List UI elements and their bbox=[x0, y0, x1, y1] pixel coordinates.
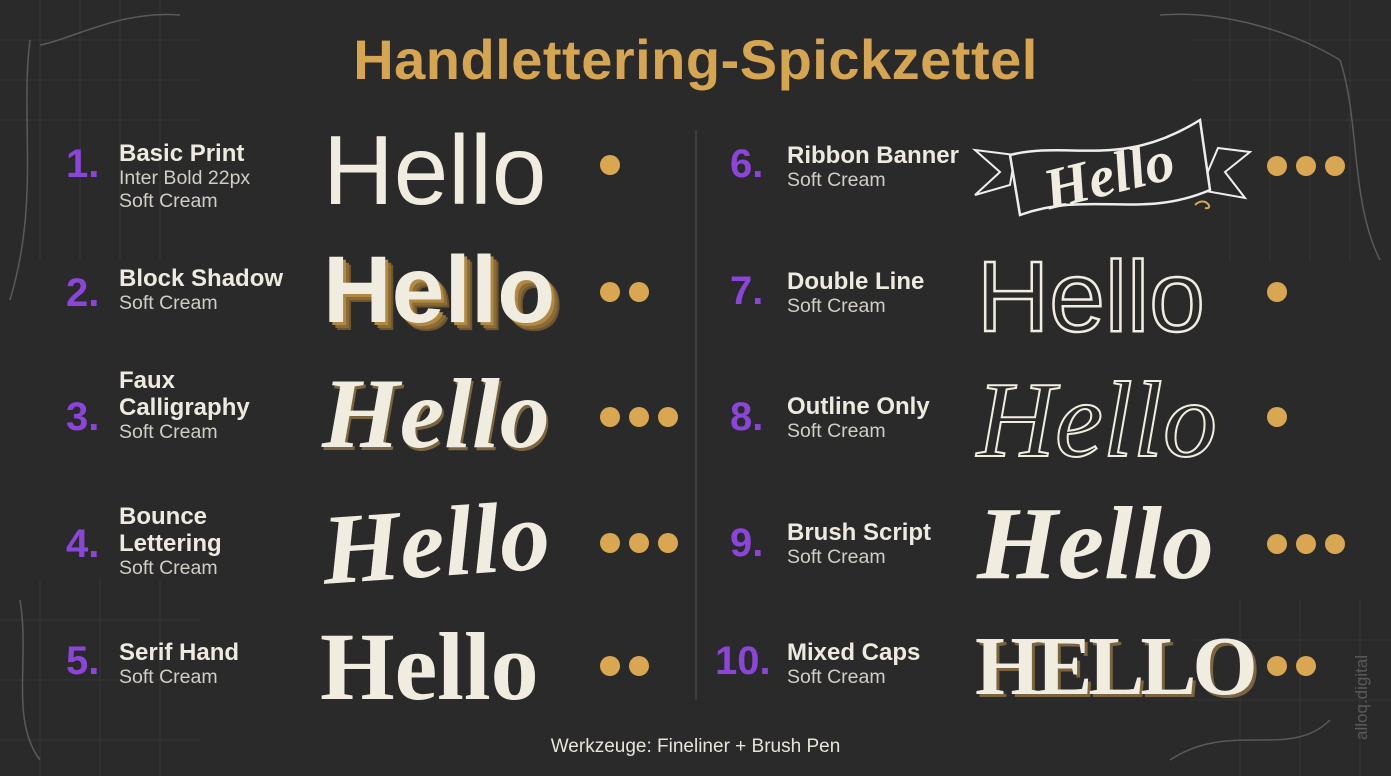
row 1: Basic Print bbox=[119, 140, 244, 167]
row 8 bbox=[730, 380, 1287, 458]
row 3: Soft Cream bbox=[119, 421, 218, 443]
row 9 bbox=[730, 486, 1345, 601]
row 4: Hello bbox=[318, 479, 553, 606]
row 8: 8. bbox=[730, 395, 763, 439]
row 7 bbox=[730, 257, 1287, 334]
row 4: 4. bbox=[66, 522, 99, 566]
watermark: alloq.digital bbox=[1352, 655, 1371, 740]
row 3: Faux bbox=[119, 367, 175, 394]
title: Handlettering-Spickzettel bbox=[353, 28, 1038, 91]
row 5: Soft Cream bbox=[119, 666, 218, 688]
row 7: Soft Cream bbox=[787, 295, 886, 317]
row 9: Hello bbox=[977, 486, 1214, 601]
row 1: Hello bbox=[323, 115, 546, 225]
row 5: Serif Hand bbox=[119, 639, 239, 666]
row 7: 7. bbox=[730, 269, 763, 313]
row 10: 10. bbox=[715, 639, 771, 683]
row 10: Mixed Caps bbox=[787, 639, 920, 666]
row 10 bbox=[715, 620, 1316, 713]
row 3: 3. bbox=[66, 395, 99, 439]
row 10: Soft Cream bbox=[787, 666, 886, 688]
row 5: 5. bbox=[66, 639, 99, 683]
ribbon banner: Hello bbox=[1036, 127, 1181, 222]
row 4: Bounce bbox=[119, 503, 207, 530]
row 6: Ribbon Banner bbox=[787, 142, 959, 169]
row 1 bbox=[66, 115, 620, 225]
row 6: Soft Cream bbox=[787, 169, 886, 191]
row 4: Lettering bbox=[119, 530, 222, 557]
footer: Werkzeuge: Fineliner + Brush Pen bbox=[551, 736, 840, 757]
row 1: 1. bbox=[66, 142, 99, 186]
row 2: 2. bbox=[66, 271, 99, 315]
row 5 bbox=[66, 613, 649, 720]
row 9: Brush Script bbox=[787, 519, 931, 546]
row 2 bbox=[66, 237, 649, 343]
ribbon banner bbox=[972, 118, 1252, 222]
row 4: Soft Cream bbox=[119, 557, 218, 579]
row 3 bbox=[66, 358, 678, 469]
row 8: Soft Cream bbox=[787, 420, 886, 442]
row 2: Block Shadow bbox=[119, 265, 283, 292]
row 3: Calligraphy bbox=[119, 394, 250, 421]
row 5: Hello bbox=[320, 613, 539, 720]
row 6: 6. bbox=[730, 142, 763, 186]
row 2: Soft Cream bbox=[119, 292, 218, 314]
row 9: Soft Cream bbox=[787, 546, 886, 568]
row 6 bbox=[730, 118, 1345, 222]
row 1: Inter Bold 22px bbox=[119, 167, 250, 189]
row 4 bbox=[66, 479, 678, 606]
row 9: 9. bbox=[730, 521, 763, 565]
row 10: HELLO bbox=[975, 620, 1254, 713]
row 3: Hello bbox=[322, 358, 550, 469]
row 7: Double Line bbox=[787, 268, 924, 295]
row 1: Soft Cream bbox=[119, 190, 218, 212]
row 8: Outline Only bbox=[787, 393, 930, 420]
row 2: Hello bbox=[323, 237, 555, 343]
